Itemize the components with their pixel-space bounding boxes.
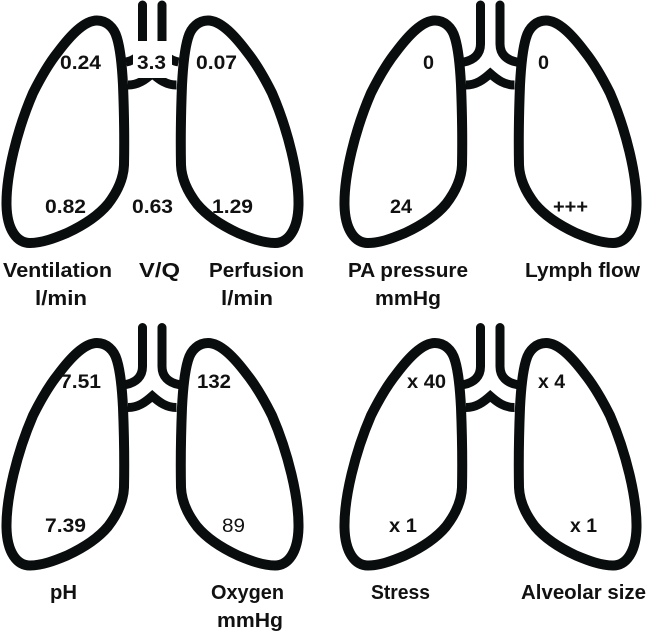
panel: pH and oxygen (6, 328, 299, 632)
label: Perfusion: Perfusion (209, 259, 304, 282)
value: x 40: x 40 (407, 372, 446, 393)
value: 0.24: 0.24 (60, 53, 101, 74)
label: ventilation unit: l/min (35, 287, 87, 310)
value: 89: 89 (222, 516, 245, 537)
panel: ventilation, V/Q and perfusion (3, 5, 304, 310)
value: x 1: x 1 (570, 516, 597, 537)
panel: stress and alveolar size (344, 328, 646, 604)
icon: lungs (344, 328, 637, 566)
label: pH: pH (50, 581, 77, 604)
value: 24: 24 (390, 197, 412, 218)
label: V/Q: V/Q (139, 259, 180, 282)
label: Lymph flow: Lymph flow (525, 259, 640, 282)
icon: lungs with masked airway (6, 5, 299, 243)
label: Oxygen: Oxygen (211, 581, 284, 604)
icon: lungs (6, 328, 299, 566)
value: 0: 0 (538, 53, 549, 74)
label: Ventilation: Ventilation (3, 259, 112, 282)
label: Alveolar size: Alveolar size (521, 581, 646, 604)
value: 132: 132 (197, 372, 231, 393)
label: Stress: Stress (371, 581, 430, 604)
value: 7.39: 7.39 (45, 516, 86, 537)
value: x 4: x 4 (538, 372, 565, 393)
value: 1.29: 1.29 (212, 197, 253, 218)
label: mmHg: mmHg (375, 287, 441, 310)
value: 0.07: 0.07 (196, 53, 237, 74)
value: x 1: x 1 (389, 516, 417, 537)
label: mmHg: mmHg (217, 609, 283, 632)
label: perfusion unit: l/min (221, 287, 273, 310)
icon: lungs (344, 5, 637, 243)
value: 0.82: 0.82 (45, 197, 86, 218)
value: 0.63: 0.63 (132, 197, 173, 218)
value: 0: 0 (423, 53, 434, 74)
value: 7.51: 7.51 (60, 372, 101, 393)
value: 3.3: 3.3 (137, 53, 166, 74)
value: +++: +++ (553, 197, 588, 218)
panel: PA pressure and lymph flow (344, 5, 640, 310)
label: PA pressure: PA pressure (348, 259, 468, 282)
